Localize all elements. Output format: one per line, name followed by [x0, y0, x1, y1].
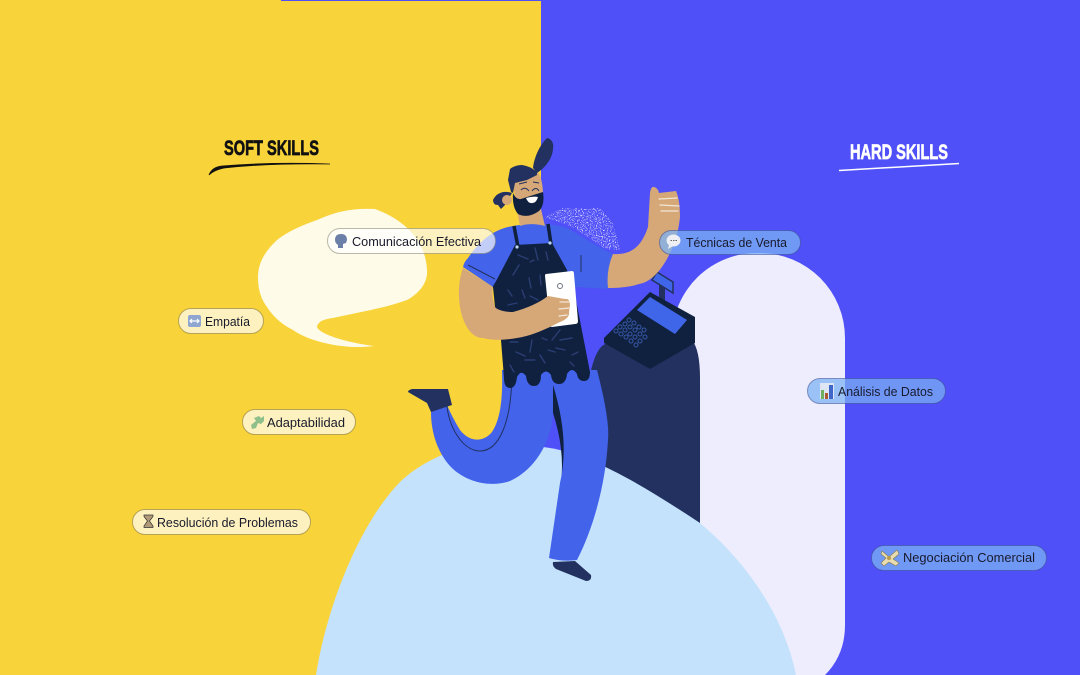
apron rivets	[515, 245, 519, 249]
icon: puzzle piece	[251, 416, 264, 429]
beard	[513, 192, 544, 216]
lavender arch shape	[672, 253, 845, 675]
character	[408, 138, 680, 581]
pill: Adaptabilidad: Adaptabilidad	[267, 415, 345, 430]
right arm thumbs up	[608, 187, 680, 288]
pill: Empatía: Empatía	[205, 314, 251, 329]
blue shirt	[463, 224, 613, 330]
icon: bar chart	[820, 383, 834, 399]
hair plume	[533, 138, 553, 173]
standing leg	[549, 370, 608, 561]
left arm and hand	[459, 268, 570, 340]
pill: Técnicas de Venta: Técnicas de Venta	[686, 235, 788, 250]
pill: Técnicas de Venta	[660, 230, 800, 254]
pill: Resolución de Problemas	[132, 510, 310, 534]
apron confetti pattern	[508, 248, 578, 372]
bent leg seam	[447, 370, 512, 451]
hard skills underline	[839, 164, 959, 170]
pill: Comunicación Efectiva	[328, 228, 496, 254]
closed eyes	[519, 182, 539, 191]
heading: hard skills	[839, 141, 959, 170]
icon: money with wings	[881, 550, 899, 566]
cash register	[604, 272, 695, 369]
pill: Análisis de Datos: Análisis de Datos	[838, 384, 933, 399]
pill: Empatía	[178, 308, 264, 334]
icon: speech balloon	[666, 234, 680, 249]
navy counter	[590, 340, 700, 530]
ear	[502, 195, 512, 205]
soft skills title: SOFT SKILLS	[224, 137, 319, 160]
neck	[516, 205, 545, 226]
pill: Comunicación Efectiva: Comunicación Efectiva	[352, 234, 482, 249]
apron body with drips	[493, 243, 590, 388]
pill: Negociación Comercial: Negociación Comercial	[903, 550, 1035, 565]
sleeve fold lines	[468, 255, 581, 287]
blue background panel: hard skills	[541, 0, 1080, 675]
lower shoe	[553, 561, 591, 581]
ponytail	[493, 192, 512, 209]
leg shadow	[553, 385, 567, 483]
face	[513, 172, 543, 205]
register keypad	[614, 318, 647, 347]
hard skills title: HARD SKILLS	[850, 141, 948, 164]
yellow background panel: soft skills	[0, 0, 541, 675]
apron	[493, 224, 590, 388]
dust particle cloud	[545, 208, 620, 250]
hand finger lines	[559, 302, 569, 316]
hair cap	[508, 165, 537, 193]
heading: soft skills	[209, 137, 330, 175]
pill: Análisis de Datos	[808, 378, 946, 404]
icon: speaking head	[335, 234, 347, 248]
pill: Adaptabilidad	[242, 410, 356, 434]
upper shoe	[408, 389, 452, 412]
register body	[604, 292, 695, 369]
smile	[526, 197, 538, 203]
phone body	[545, 271, 578, 327]
icon: left right arrow	[188, 315, 201, 327]
bent leg	[431, 370, 553, 484]
phone button	[558, 284, 562, 288]
soft skills underline	[209, 163, 330, 175]
register display pole	[659, 283, 665, 303]
register screen	[637, 297, 687, 334]
pill: Negociación Comercial	[872, 546, 1046, 570]
register customer display	[652, 272, 673, 293]
apron straps	[514, 224, 551, 247]
light blue hill	[316, 446, 796, 675]
icon: hourglass	[144, 515, 153, 528]
phone	[545, 271, 578, 327]
thumb finger lines	[659, 198, 679, 211]
pill: Resolución de Problemas: Resolución de Problemas	[157, 515, 298, 530]
cream speech bubble	[258, 209, 427, 347]
